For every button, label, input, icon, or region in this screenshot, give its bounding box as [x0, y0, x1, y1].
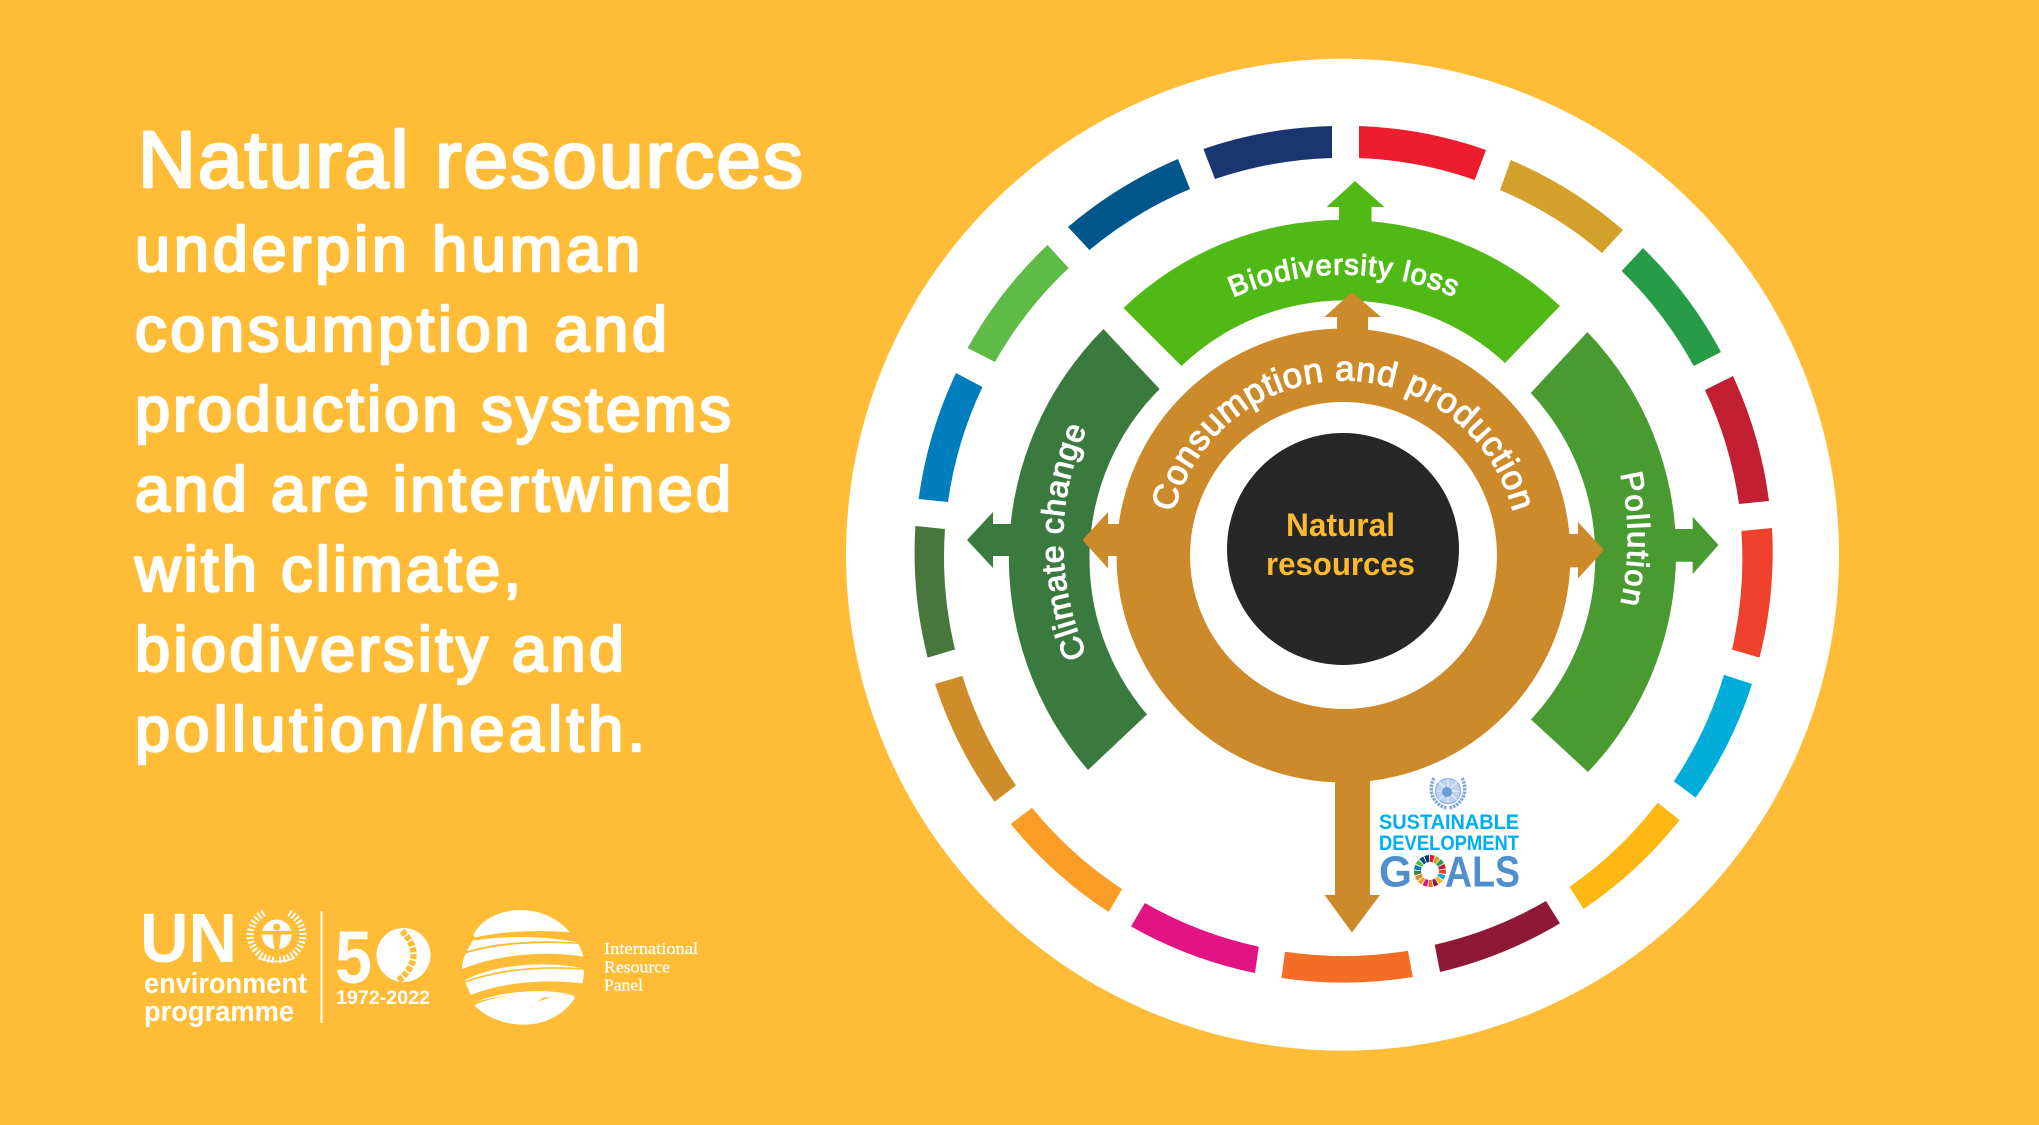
text block: body statement: pollution/health. — [135, 695, 645, 765]
text block: body statement: consumption and — [135, 295, 667, 365]
text block: body statement: and are intertwined — [135, 455, 731, 525]
wordmark: goals — [1379, 848, 1520, 896]
band: climate change — [967, 329, 1160, 770]
icon: swirl globe — [462, 910, 584, 1025]
wordmark: UN: UN — [140, 899, 237, 977]
wordmark: environment programme: environment — [144, 968, 307, 1000]
ring: consumption and production — [1082, 292, 1604, 932]
label: consumption and production: Consumption and production — [1152, 361, 1530, 511]
icon: UN environment emblem — [250, 913, 303, 962]
years: 1972-2022: 1972-2022 — [336, 987, 430, 1009]
wordmark: environment programme: programme — [144, 996, 294, 1028]
core: natural resources — [1227, 433, 1459, 665]
text block: body statement: biodiversity and — [135, 615, 624, 685]
arrow: consumption right — [1565, 522, 1604, 578]
icon: SDG colour wheel — [1418, 858, 1442, 884]
heading: natural resources statement — [134, 115, 803, 765]
wordmark: goals: ALS — [1445, 848, 1520, 896]
numeral: 50 years badge: 5 — [335, 916, 372, 999]
text block: body statement: underpin human — [135, 215, 640, 285]
panel: circular diagram — [846, 58, 1839, 1051]
logo: international resource panel — [462, 910, 698, 1025]
label: natural resources: Natural — [1286, 507, 1395, 543]
ring: 17 SDG colour segments — [915, 126, 1773, 983]
arrow: pollution right — [1673, 517, 1718, 574]
logo: sustainable development goals — [1379, 778, 1520, 896]
label: pollution: Pollution — [1620, 472, 1651, 605]
divider — [320, 911, 322, 1023]
wordmark: goals: G — [1379, 848, 1412, 896]
wordmark: sustainable development: SUSTAINABLE — [1379, 810, 1519, 834]
numeral: 50 years badge — [335, 916, 430, 999]
arrow: consumption left — [1082, 512, 1122, 568]
label: natural resources — [1266, 507, 1415, 582]
logo: UN environment programme — [140, 899, 430, 1028]
label: biodiversity loss: Biodiversity loss — [1227, 254, 1458, 298]
arrow: climate change left — [967, 512, 1012, 568]
icon: UN emblem — [1431, 778, 1465, 808]
label: climate change: Climate change — [1040, 425, 1085, 660]
wordmark: international resource panel — [604, 939, 698, 995]
text block: body statement: with climate, — [134, 535, 521, 605]
text block: body statement: production systems — [135, 375, 731, 445]
label: natural resources: resources — [1266, 546, 1415, 582]
white disc background — [846, 59, 1839, 1051]
title: Natural resources — [138, 115, 803, 204]
band: pollution — [1530, 332, 1718, 772]
wordmark: international resource panel: International — [604, 939, 698, 958]
wordmark: sustainable development — [1379, 810, 1519, 855]
wordmark: international resource panel: Resource — [604, 958, 670, 977]
band: biodiversity loss — [1124, 181, 1560, 366]
arrow: consumption down — [1324, 775, 1380, 932]
arrow: consumption up — [1324, 292, 1381, 335]
wordmark: international resource panel: Panel — [604, 976, 643, 995]
text block: body statement — [134, 215, 731, 765]
arrow: biodiversity up — [1326, 181, 1384, 225]
wordmark: environment programme — [144, 968, 307, 1028]
wordmark: sustainable development: DEVELOPMENT — [1379, 831, 1519, 855]
